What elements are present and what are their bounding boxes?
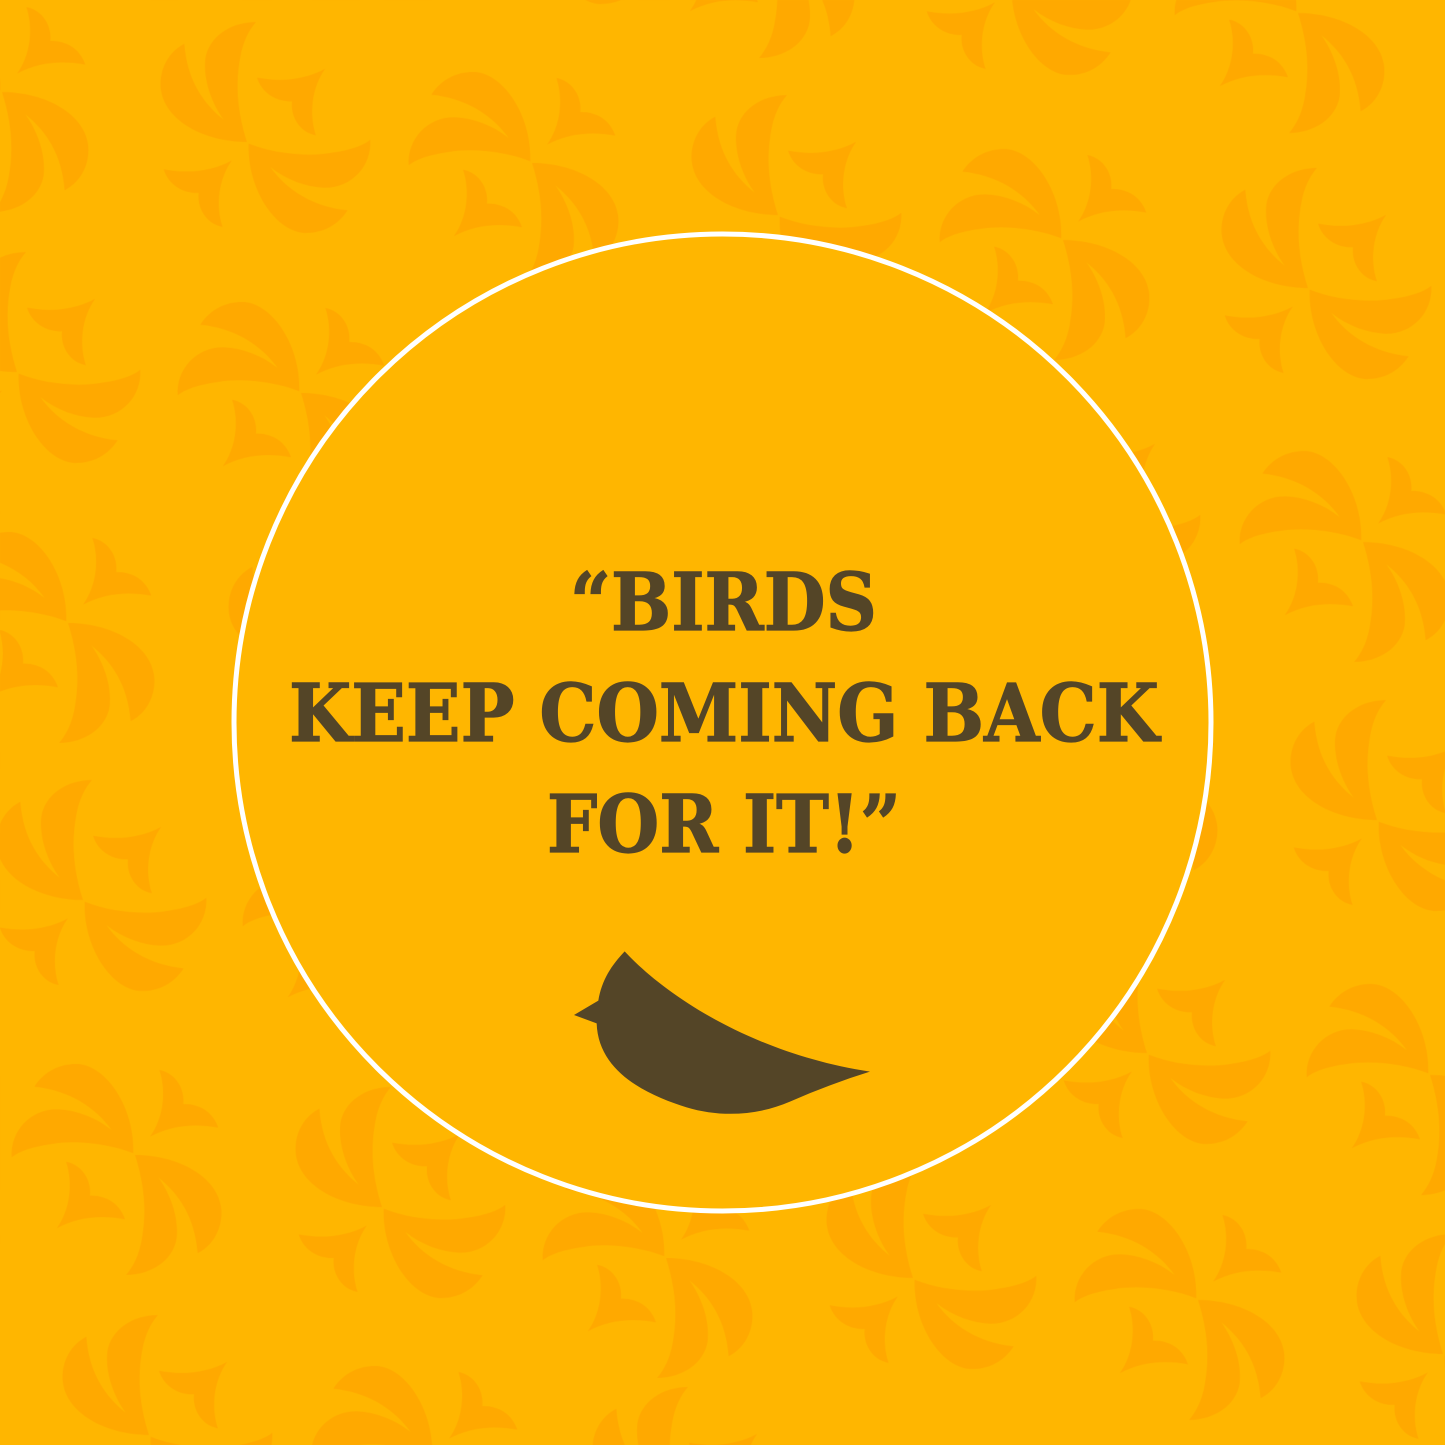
quote text xyxy=(289,555,1161,871)
quote line 2: KEEP COMING BACK xyxy=(289,666,1161,760)
quote line 3: FOR IT!” xyxy=(547,777,901,871)
icon: bird silhouette xyxy=(574,951,870,1114)
quote line 1: “BIRDS xyxy=(570,555,877,649)
white ring circle panel xyxy=(234,234,1211,1211)
